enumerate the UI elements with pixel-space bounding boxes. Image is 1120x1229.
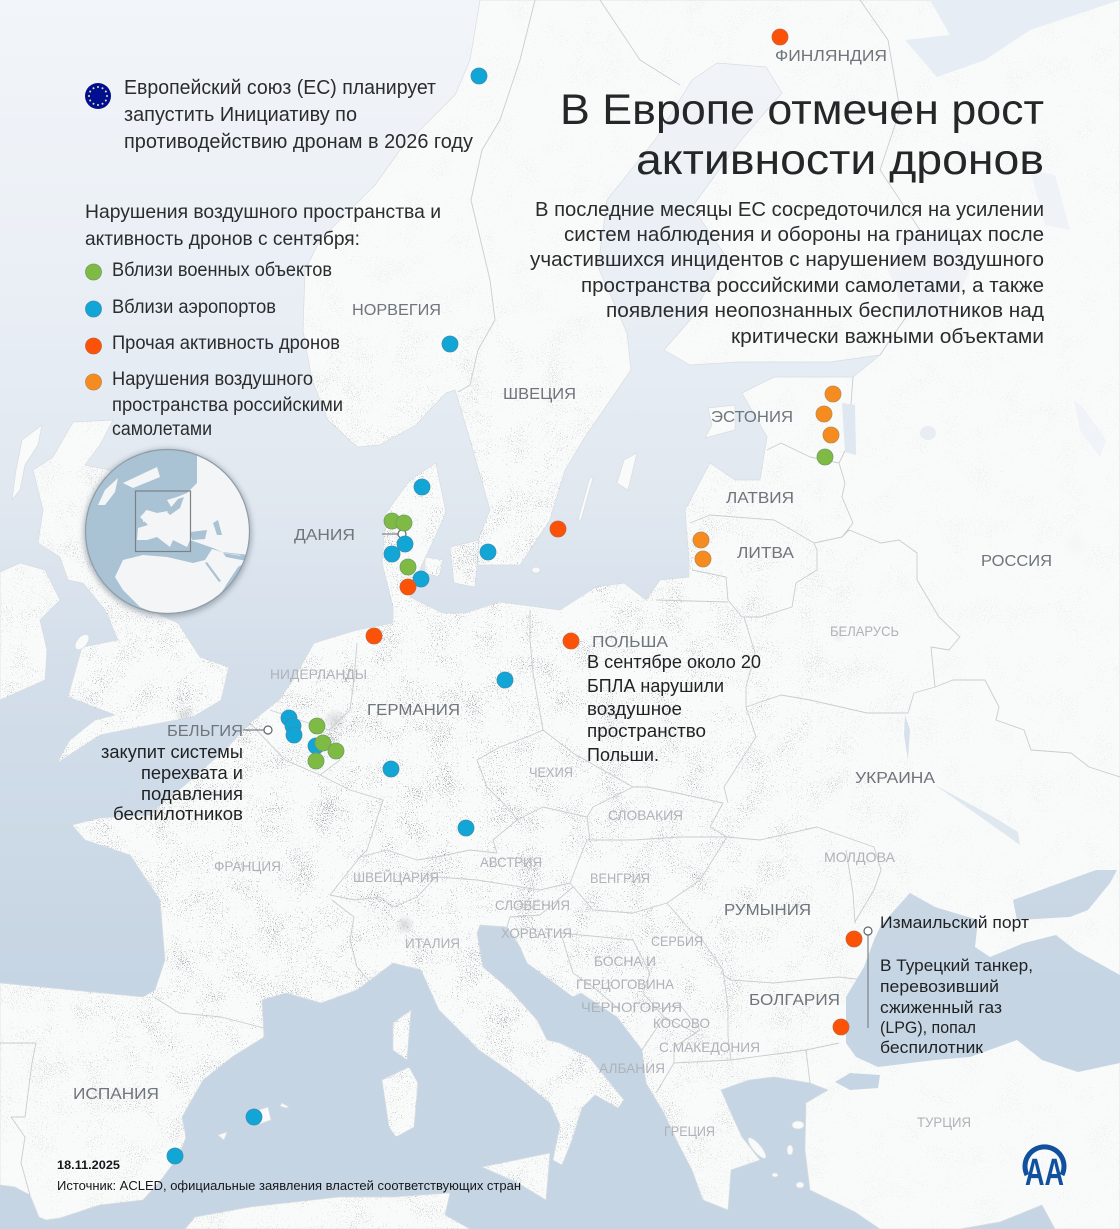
country labels: СЛОВАКИЯ (608, 807, 683, 823)
callout: Turkish tanker: В Турецкий танкер, (880, 956, 1033, 975)
country labels: МОЛДОВА (824, 849, 896, 865)
EU initiative note: Европейский союз (ЕС) планирует (124, 77, 436, 99)
country labels: ГЕРМАНИЯ (367, 702, 460, 719)
country labels: ФРАНЦИЯ (214, 858, 281, 874)
callout: Belgium: подавления (141, 784, 243, 804)
intro text block (530, 199, 1044, 348)
locator globe (84, 449, 255, 620)
EU initiative note: противодействию дронам в 2026 году (124, 131, 473, 153)
legend item: russian aircraft: самолетами (112, 419, 212, 440)
intro text block: систем наблюдения и обороны на границах после (564, 224, 1044, 246)
markers: near military sites (308, 449, 833, 769)
callout: Poland: пространство (587, 721, 706, 741)
country labels: СЕРБИЯ (651, 933, 703, 949)
country labels: ЛИТВА (737, 545, 794, 562)
legend (85, 201, 441, 440)
country labels: УКРАИНА (855, 770, 935, 787)
title: В Европе отмечен рост (560, 86, 1044, 134)
country labels: ГРЕЦИЯ (664, 1123, 715, 1139)
callout: Poland: воздушное (587, 699, 682, 719)
intro text block: появления неопознанных беспилотников над (606, 300, 1044, 322)
country labels (73, 48, 1052, 1139)
date: 18.11.2025 (57, 1158, 120, 1172)
country labels: БЕЛАРУСЬ (830, 623, 899, 639)
country labels: ВЕНГРИЯ (590, 870, 650, 886)
country labels: ПОЛЬША (592, 634, 668, 651)
callout: Poland: БПЛА нарушили (587, 676, 724, 696)
legend item: russian aircraft (86, 369, 343, 440)
legend item: other drone activity: Прочая активность дронов (112, 333, 340, 354)
connector: Denmark (382, 530, 406, 538)
legend heading: Нарушения воздушного пространства и (85, 201, 441, 223)
country labels: С.МАКЕДОНИЯ (659, 1039, 760, 1055)
country labels: НОРВЕГИЯ (352, 302, 441, 319)
country labels: БОЛГАРИЯ (749, 992, 840, 1009)
country labels: КОСОВО (653, 1015, 710, 1031)
source: Источник: ACLED, официальные заявления властей соответствующих стран (57, 1178, 521, 1193)
legend heading: активность дронов с сентября: (85, 228, 360, 250)
country labels: НИДЕРЛАНДЫ (270, 666, 367, 682)
callout: Izmail port: Измаильский порт (880, 913, 1029, 932)
callout: Belgium: закупит системы (101, 742, 243, 762)
markers: Russian aircraft violations (693, 386, 841, 567)
callout: Poland: Польши. (587, 745, 659, 765)
country labels: ФИНЛЯНДИЯ (775, 48, 887, 65)
country labels: ХОРВАТИЯ (501, 925, 572, 941)
callout: Turkish tanker (880, 956, 1033, 1057)
callout: Turkish tanker: беспилотник (880, 1038, 984, 1057)
country labels: ЭСТОНИЯ (711, 409, 793, 426)
country labels: БОСНА И (594, 953, 656, 969)
country labels: ЧЕРНОГОРИЯ (581, 999, 682, 1015)
callout: Belgium: беспилотников (113, 804, 243, 824)
intro text block: В последние месяцы ЕС сосредоточился на усилении (535, 199, 1044, 221)
logo: Anadolu Agency (1025, 1147, 1064, 1194)
callout: Poland (587, 652, 761, 765)
legend item: russian aircraft: пространства российскими (112, 395, 343, 416)
country labels: ШВЕЙЦАРИЯ (353, 868, 439, 885)
country labels: ШВЕЦИЯ (503, 386, 576, 403)
country labels: ИТАЛИЯ (405, 935, 460, 951)
EU initiative note (124, 77, 473, 153)
connector: Izmail (864, 927, 872, 1028)
title (560, 86, 1044, 184)
legend item: airports: Вблизи аэропортов (112, 297, 276, 318)
logo: Anadolu Agency: AA (1025, 1152, 1064, 1194)
country labels: СЛОВЕНИЯ (495, 897, 570, 913)
country labels: БЕЛЬГИЯ (167, 723, 243, 740)
title: активности дронов (636, 136, 1044, 184)
map: inner seas and lakes (835, 0, 1120, 1090)
icon: EU flag (85, 83, 111, 109)
country labels: ИСПАНИЯ (73, 1086, 159, 1103)
country labels: РУМЫНИЯ (724, 902, 811, 919)
callout: Turkish tanker: сжиженный газ (880, 998, 1002, 1017)
legend heading (85, 201, 441, 250)
markers: near airports (167, 68, 513, 1164)
EU initiative note: запустить Инициативу по (124, 104, 357, 126)
markers: other drone activity (366, 29, 862, 1035)
country labels: ЧЕХИЯ (529, 764, 573, 780)
country labels: ДАНИЯ (294, 527, 355, 544)
legend item: military: Вблизи военных объектов (112, 260, 332, 281)
country labels: АВСТРИЯ (480, 854, 542, 870)
country labels: РОССИЯ (981, 553, 1052, 570)
country labels: ГЕРЦОГОВИНА (576, 976, 675, 992)
intro text block: участившихся инцидентов с нарушением воздушного (530, 249, 1044, 271)
intro text block: пространства российскими самолетами, а также (581, 275, 1044, 297)
country labels: АЛБАНИЯ (599, 1060, 665, 1076)
country labels: ТУРЦИЯ (917, 1114, 971, 1130)
country labels: ЛАТВИЯ (726, 490, 794, 507)
callout: Belgium: перехвата и (141, 763, 243, 783)
callout: Turkish tanker: перевозивший (880, 977, 999, 996)
callout: Turkish tanker: (LPG), попал (880, 1018, 976, 1037)
intro text block: критически важными объектами (731, 326, 1044, 348)
connector: Belgium (243, 726, 272, 734)
callout: Poland: В сентябре около 20 (587, 652, 761, 672)
callout: Belgium (101, 742, 243, 824)
legend item: russian aircraft: Нарушения воздушного (112, 369, 313, 390)
